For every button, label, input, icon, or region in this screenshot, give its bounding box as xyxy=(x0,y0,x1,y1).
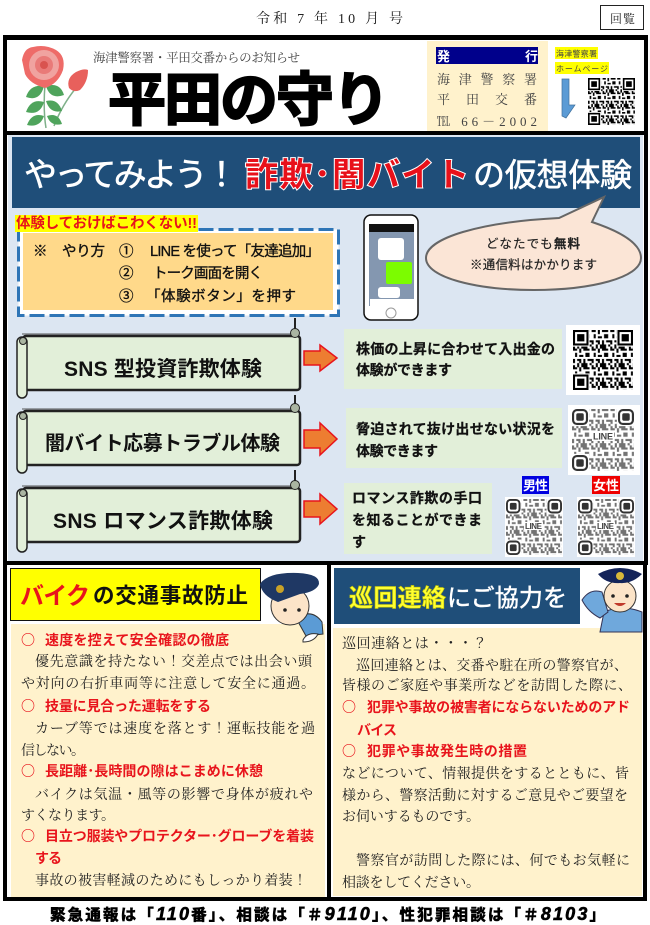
heading: 巡回連絡 xyxy=(349,585,446,612)
title banner: の仮想体験 xyxy=(473,157,632,193)
scroll banner: SNS 型投資詐欺体験 xyxy=(64,358,262,381)
bullet list: カーブ等では速度を落とす！運転技能を過 xyxy=(35,720,315,737)
bullet list: 優先意識を持たない！交差点では出会い頭 xyxy=(35,653,313,670)
body text: 巡回連絡とは、交番や駐在所の警察官が、 xyxy=(356,657,628,674)
bullet list: ○ xyxy=(21,630,35,650)
qr code: LINE xyxy=(593,432,613,442)
arrow xyxy=(304,494,337,524)
panel: virtual experience xyxy=(8,135,643,561)
arrow xyxy=(304,423,337,455)
publisher box: 行 xyxy=(525,49,538,64)
body text: 犯罪や事故発生時の措置 xyxy=(367,743,527,759)
description: 株価の上昇に合わせて入出金の xyxy=(356,341,555,357)
heading: の交通事故防止 xyxy=(93,584,248,608)
scroll banner xyxy=(17,318,300,398)
heading xyxy=(334,568,580,624)
description: す xyxy=(352,534,366,550)
label: female: 女性 xyxy=(593,478,619,493)
scroll banner: 闇バイト応募トラブル体験 xyxy=(45,431,280,455)
bullet list: ○ xyxy=(21,761,35,781)
qr code xyxy=(566,325,640,395)
heading: バイク xyxy=(20,583,90,610)
arrow xyxy=(304,345,337,371)
bullet list: する xyxy=(35,850,62,866)
panel: motorcycle accident prevention xyxy=(10,568,325,897)
bullet list: 事故の被害軽減のためにもしっかり着装！ xyxy=(35,872,307,889)
body text xyxy=(342,636,632,891)
body text: 皆様のご家庭や事業所などを訪問した際に、 xyxy=(342,677,632,694)
homepage label: ホームページ xyxy=(556,64,608,74)
icon: saluting police officer xyxy=(582,568,642,632)
description: を知ることができま xyxy=(352,512,482,528)
callout: どなたでも無料 xyxy=(486,236,580,251)
description xyxy=(344,483,492,554)
subtitle: 海津警察署・平田交番からのお知らせ xyxy=(93,50,300,65)
qr code: male xyxy=(505,497,563,557)
method box: ② xyxy=(119,265,134,282)
bullet list: 目立つ服装やプロテクター･グローブを着装 xyxy=(45,828,314,844)
body text: 巡回連絡とは・・・？ xyxy=(342,636,487,652)
body text: 犯罪や事故の被害者にならないためのアド xyxy=(367,699,630,715)
publisher box: 平 田 交 番 xyxy=(437,92,537,107)
scroll banner xyxy=(17,395,300,473)
bullet list: や対向の右折車両等に注意して安全に通過。 xyxy=(21,675,315,692)
bullet list: すくなります。 xyxy=(21,808,115,824)
bullet list: 速度を控えて安全確認の徹底 xyxy=(45,632,229,648)
description: 体験ができます xyxy=(356,362,452,378)
circulation stamp box xyxy=(600,6,644,30)
panel: patrol visits xyxy=(333,568,642,896)
bullet list: 長距離･長時間の隙はこまめに休憩 xyxy=(45,763,263,779)
homepage label xyxy=(555,47,609,74)
homepage label: 海津警察署 xyxy=(556,48,597,58)
body text: ○ xyxy=(342,741,356,761)
title banner: やってみよう！ xyxy=(24,156,238,193)
badge xyxy=(15,215,198,232)
icon: smartphone xyxy=(364,215,418,320)
method box xyxy=(15,215,338,316)
scroll banner: SNS ロマンス詐欺体験 xyxy=(53,510,273,533)
description: ロマンス詐欺の手口 xyxy=(352,490,482,506)
title banner: 詐欺･闇バイト xyxy=(245,156,469,193)
qr code: homepage xyxy=(588,78,635,125)
heading xyxy=(10,568,260,620)
body text: 相談をしてください。 xyxy=(342,874,480,891)
method box: 体験しておけばこわくない!! xyxy=(16,215,197,232)
description xyxy=(344,329,562,389)
method box: ① xyxy=(119,243,134,260)
publisher box: 海津警察署 xyxy=(437,72,537,87)
row: dark part-time job xyxy=(17,395,640,475)
bullet list: ○ xyxy=(21,696,35,716)
row: SNS investment xyxy=(17,318,640,398)
scroll banner xyxy=(17,470,300,552)
description xyxy=(346,408,562,468)
body text: お伺いするものです。 xyxy=(342,809,480,825)
callout: ※通信料はかかります xyxy=(470,257,597,272)
bullet list: 技量に見合った運転をする xyxy=(45,698,211,714)
body text: ○ xyxy=(342,697,356,717)
publisher box xyxy=(427,41,548,131)
bullet list: ○ xyxy=(21,826,35,846)
bullet list: 信しない。 xyxy=(21,743,85,759)
issue date: 令和 7 年 10 月 号 xyxy=(256,10,403,27)
bullet list xyxy=(21,630,315,889)
label: male: 男性 xyxy=(523,478,548,493)
icon: down arrow xyxy=(562,79,575,118)
footer: emergency numbers: 緊急通報は「110番」、相談は「＃9110」、性犯罪相談は「＃8103」 xyxy=(50,904,605,924)
icon: police officer xyxy=(260,573,323,642)
method box: トーク画面を開く xyxy=(153,265,263,282)
bullet list: バイクは気温・風等の影響で身体が疲れや xyxy=(35,786,313,803)
header masthead xyxy=(22,41,635,133)
qr code xyxy=(568,405,640,475)
icon: rose xyxy=(22,46,88,128)
publisher box: 発 xyxy=(437,49,450,64)
body text: バイス xyxy=(357,722,397,738)
qr code: female xyxy=(577,497,635,557)
method box: ③ xyxy=(119,288,134,305)
description: 体験できます xyxy=(356,443,438,459)
callout xyxy=(426,197,641,290)
body text: 様から、警察活動に対するご意見やご要望を xyxy=(342,787,628,804)
row: romance scam xyxy=(17,470,635,557)
body text: などについて、情報提供をするとともに、皆 xyxy=(342,765,629,782)
steps: ※ xyxy=(33,244,48,260)
masthead title: 平田の守り xyxy=(108,68,390,133)
title banner xyxy=(12,137,640,208)
heading: にご協力を xyxy=(447,585,567,612)
publisher box: ℡ 66－2002 xyxy=(437,114,537,129)
qr code: male: LINE xyxy=(525,522,543,531)
body text: 警察官が訪問した際には、何でもお気軽に xyxy=(356,852,630,869)
description: 脅迫されて抜け出せない状況を xyxy=(356,421,555,437)
qr code: female: LINE xyxy=(597,522,615,531)
method box: 「体験ボタン」を押す xyxy=(146,288,296,305)
method box: やり方 xyxy=(62,243,105,260)
circulation stamp box: 回覧 xyxy=(610,12,635,26)
method box: LINE を使って「友達追加」 xyxy=(150,243,320,260)
